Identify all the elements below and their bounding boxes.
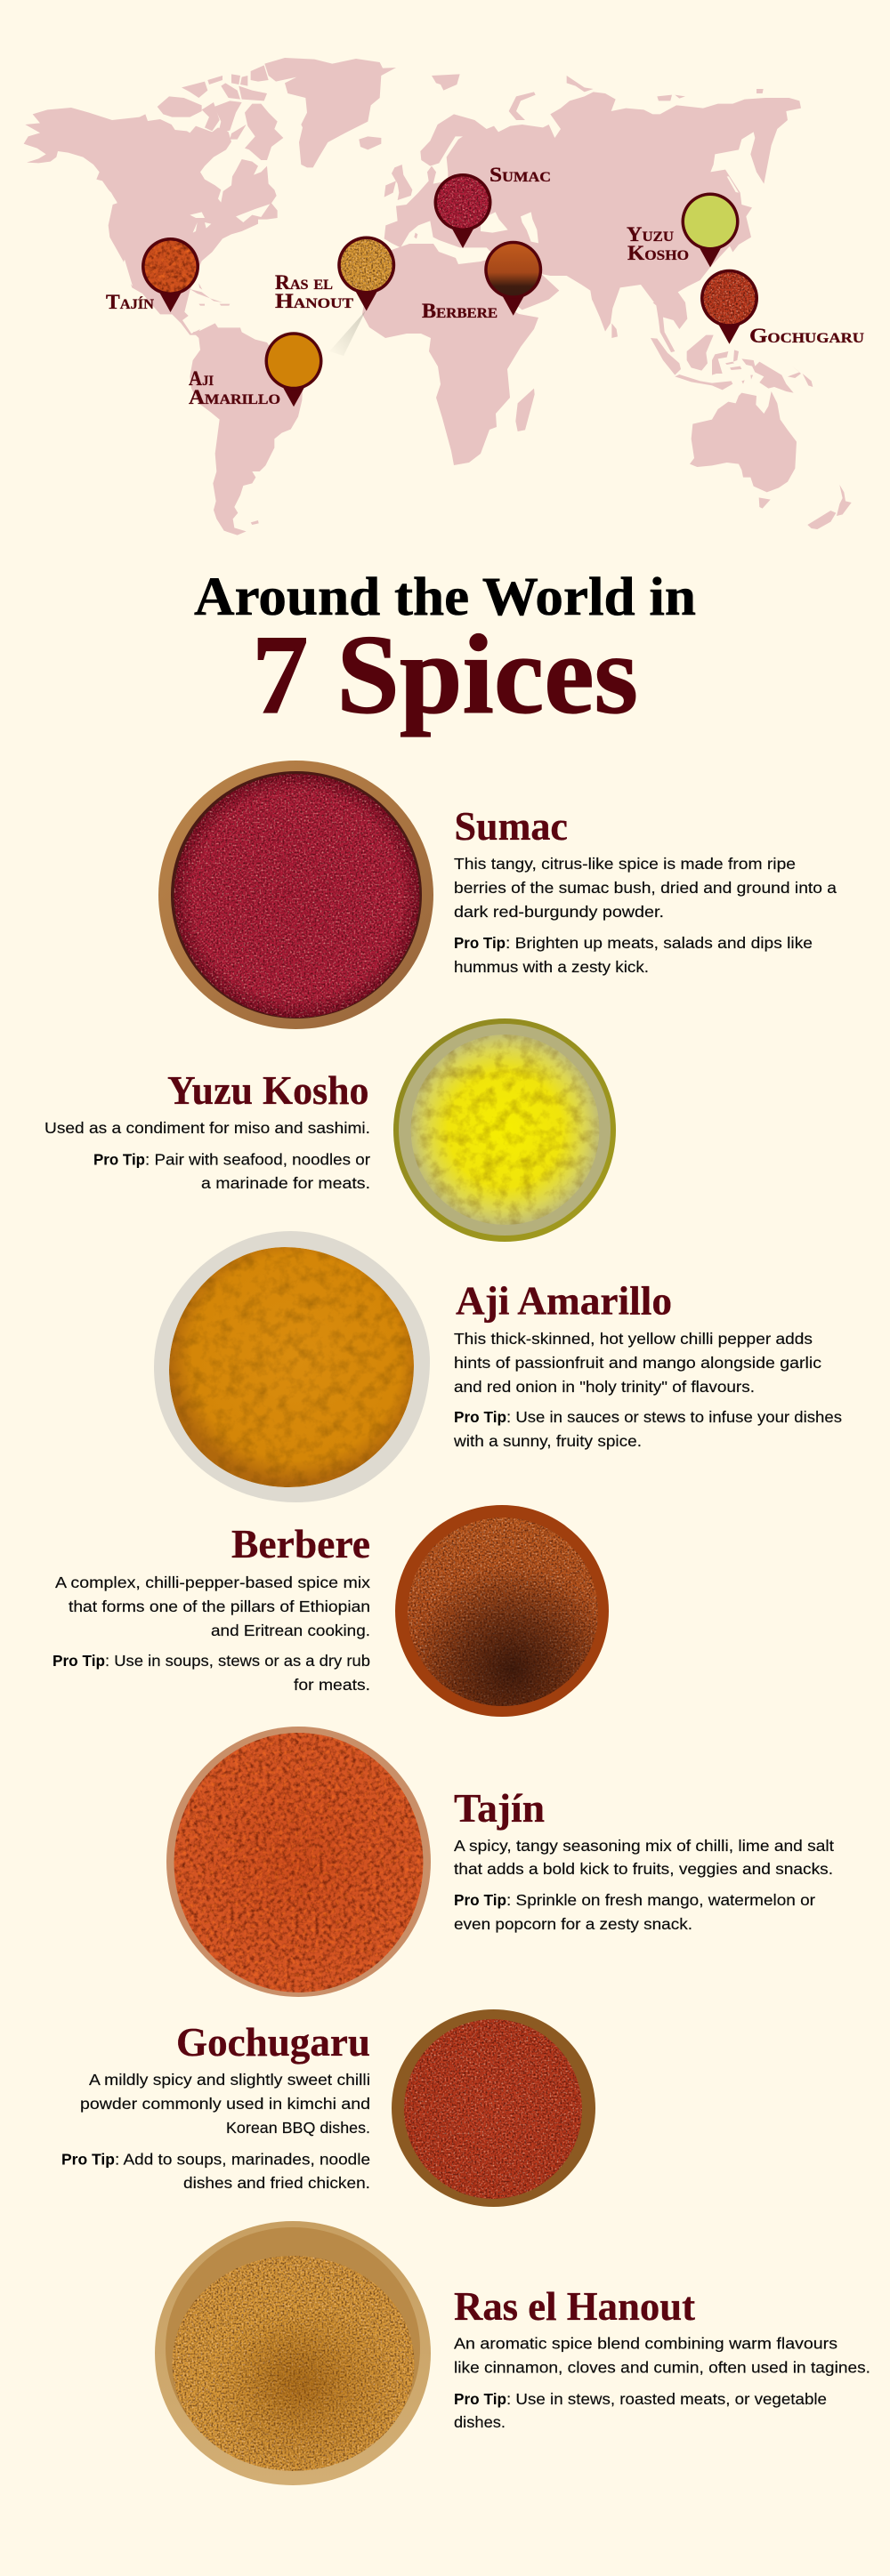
pro tip: Yuzu Kosho: a marinade for meats. bbox=[201, 1174, 370, 1192]
spice panel: Gochugaru bbox=[61, 2009, 595, 2207]
description: Sumac bbox=[454, 855, 837, 921]
pro tip: Ras el Hanout bbox=[454, 2390, 827, 2431]
pro tip: Sumac bbox=[454, 934, 813, 976]
description: Sumac: dark red-burgundy powder. bbox=[454, 903, 664, 921]
title bbox=[194, 568, 696, 737]
pro tip: Aji Amarillo bbox=[453, 1408, 842, 1450]
description: Ras el Hanout: like cinnamon, cloves and cumin, often used in tagines. bbox=[454, 2359, 870, 2377]
pro tip: Berbere: for meats. bbox=[294, 1676, 370, 1694]
description: Sumac: This tangy, citrus-like spice is made from ripe bbox=[454, 855, 796, 873]
description: Aji Amarillo: and red onion in "holy trinity" of flavours. bbox=[454, 1378, 755, 1396]
heading: Aji Amarillo: Aji Amarillo bbox=[456, 1277, 672, 1324]
pro tip: Ras el Hanout: Pro Tip bbox=[454, 2390, 506, 2408]
map pin: Aji Amarillo bbox=[265, 332, 322, 407]
pro tip: Berbere: Pro Tip bbox=[53, 1652, 105, 1670]
map pin: Berbere bbox=[484, 241, 542, 316]
description: Ras el Hanout bbox=[454, 2334, 870, 2377]
description: Berbere: and Eritrean cooking. bbox=[211, 1622, 370, 1639]
description: Berbere bbox=[55, 1574, 370, 1639]
description: Gochugaru: powder commonly used in kimchi and bbox=[80, 2095, 370, 2113]
description: Berbere: A complex, chilli-pepper-based spice mix bbox=[55, 1574, 370, 1591]
pro tip: Ras el Hanout: : Use in stews, roasted meats, or vegetable bbox=[506, 2390, 827, 2408]
map label: Ras el Hanout: Hanout bbox=[275, 290, 353, 312]
spice panel: Aji Amarillo bbox=[154, 1231, 842, 1502]
pro tip: Gochugaru: Pro Tip bbox=[61, 2151, 115, 2169]
title: Around the World in bbox=[194, 568, 696, 627]
description: Aji Amarillo: hints of passionfruit and mango alongside garlic bbox=[454, 1354, 821, 1372]
heading: Gochugaru: Gochugaru bbox=[176, 2019, 370, 2065]
map label: Yuzu Kosho: Kosho bbox=[627, 242, 689, 264]
pro tip: Ras el Hanout: dishes. bbox=[454, 2413, 506, 2431]
pro tip: Tajín: even popcorn for a zesty snack. bbox=[454, 1915, 692, 1933]
description: Ras el Hanout: An aromatic spice blend combining warm flavours bbox=[454, 2334, 837, 2352]
pro tip: Gochugaru: : Add to soups, marinades, noodle bbox=[115, 2151, 370, 2169]
map pin: Yuzu Kosho bbox=[682, 192, 739, 267]
description: Gochugaru: Korean BBQ dishes. bbox=[226, 2119, 370, 2137]
description: Aji Amarillo bbox=[454, 1330, 821, 1396]
map label: Aji Amarillo: Amarillo bbox=[189, 386, 280, 408]
pro tip: Berbere bbox=[53, 1652, 370, 1694]
map label: Gochugaru: Gochugaru bbox=[749, 325, 865, 347]
description: Tajín: A spicy, tangy seasoning mix of chilli, lime and salt bbox=[454, 1837, 834, 1855]
description: Yuzu Kosho: Used as a condiment for miso and sashimi. bbox=[44, 1119, 370, 1137]
map label: Yuzu Kosho: Yuzu bbox=[627, 223, 674, 246]
pro tip: Yuzu Kosho bbox=[93, 1151, 370, 1192]
map label: Aji Amarillo: Aji bbox=[189, 367, 214, 390]
heading: Yuzu Kosho: Yuzu Kosho bbox=[167, 1067, 368, 1113]
bowl image: Yuzu Kosho bbox=[393, 1018, 616, 1242]
description: Sumac: berries of the sumac bush, dried and ground into a bbox=[454, 879, 837, 897]
bowl image: Ras el Hanout bbox=[155, 2221, 431, 2485]
pro tip: Gochugaru: dishes and fried chicken. bbox=[183, 2174, 370, 2192]
pro tip: Sumac: Pro Tip bbox=[454, 934, 506, 952]
description: Gochugaru: A mildly spicy and slightly sweet chilli bbox=[89, 2071, 370, 2089]
spice panel: Tajín bbox=[166, 1727, 834, 1997]
map pin: Ras el Hanout bbox=[337, 237, 395, 311]
map label: Berbere: Berbere bbox=[422, 300, 498, 322]
bowl image: Tajín bbox=[166, 1727, 431, 1997]
bowl image: Sumac bbox=[158, 761, 433, 1029]
spice panel: Berbere bbox=[53, 1505, 609, 1717]
pro tip: Tajín: : Sprinkle on fresh mango, watermelon or bbox=[506, 1891, 815, 1909]
pro tip: Sumac: : Brighten up meats, salads and dips like bbox=[506, 934, 813, 952]
map label: Aji Amarillo bbox=[189, 367, 280, 408]
description: Tajín: that adds a bold kick to fruits, veggies and snacks. bbox=[454, 1860, 833, 1878]
map pin: Gochugaru bbox=[700, 270, 758, 344]
map label: Yuzu Kosho bbox=[627, 223, 689, 264]
map label: Ras el Hanout bbox=[275, 271, 353, 312]
description: Aji Amarillo: This thick-skinned, hot yellow chilli pepper adds bbox=[454, 1330, 813, 1348]
pro tip: Tajín bbox=[454, 1891, 815, 1933]
spice panel: Yuzu Kosho bbox=[44, 1018, 616, 1242]
bowl image: Aji Amarillo bbox=[154, 1231, 430, 1502]
heading: Sumac: Sumac bbox=[454, 803, 568, 849]
map pin: Tajín bbox=[142, 237, 199, 312]
pro tip: Gochugaru bbox=[61, 2151, 370, 2192]
world map bbox=[24, 58, 852, 535]
pro tip: Sumac: hummus with a zesty kick. bbox=[454, 958, 649, 976]
pro tip: Yuzu Kosho: : Pair with seafood, noodles or bbox=[145, 1151, 370, 1169]
bowl image: Berbere bbox=[395, 1505, 609, 1717]
heading: Tajín: Tajín bbox=[454, 1785, 545, 1831]
description: Berbere: that forms one of the pillars of Ethiopian bbox=[69, 1598, 370, 1615]
pro tip: Yuzu Kosho: Pro Tip bbox=[93, 1151, 145, 1169]
heading: Berbere: Berbere bbox=[231, 1521, 370, 1566]
map label: Sumac: Sumac bbox=[490, 164, 551, 186]
bowl image: Gochugaru bbox=[392, 2009, 595, 2207]
map shadow streak bbox=[329, 310, 366, 356]
description: Tajín bbox=[454, 1837, 834, 1878]
pro tip: Aji Amarillo: Pro Tip bbox=[454, 1408, 506, 1426]
description: Gochugaru bbox=[80, 2071, 370, 2137]
pro tip: Tajín: Pro Tip bbox=[454, 1891, 506, 1909]
map label: Ras el Hanout: Ras el bbox=[275, 271, 333, 294]
pro tip: Aji Amarillo: : Use in sauces or stews to infuse your dishes bbox=[506, 1408, 842, 1426]
spice panel: Ras el Hanout bbox=[155, 2221, 870, 2485]
spice panel: Sumac bbox=[158, 761, 837, 1029]
pro tip: Aji Amarillo: with a sunny, fruity spice. bbox=[453, 1432, 642, 1450]
map pin: Sumac bbox=[434, 173, 491, 248]
map label: Tajín: Tajín bbox=[106, 291, 154, 313]
title: 7 Spices bbox=[252, 613, 638, 737]
pro tip: Berbere: : Use in soups, stews or as a dry rub bbox=[105, 1652, 370, 1670]
heading: Ras el Hanout: Ras el Hanout bbox=[454, 2283, 696, 2329]
